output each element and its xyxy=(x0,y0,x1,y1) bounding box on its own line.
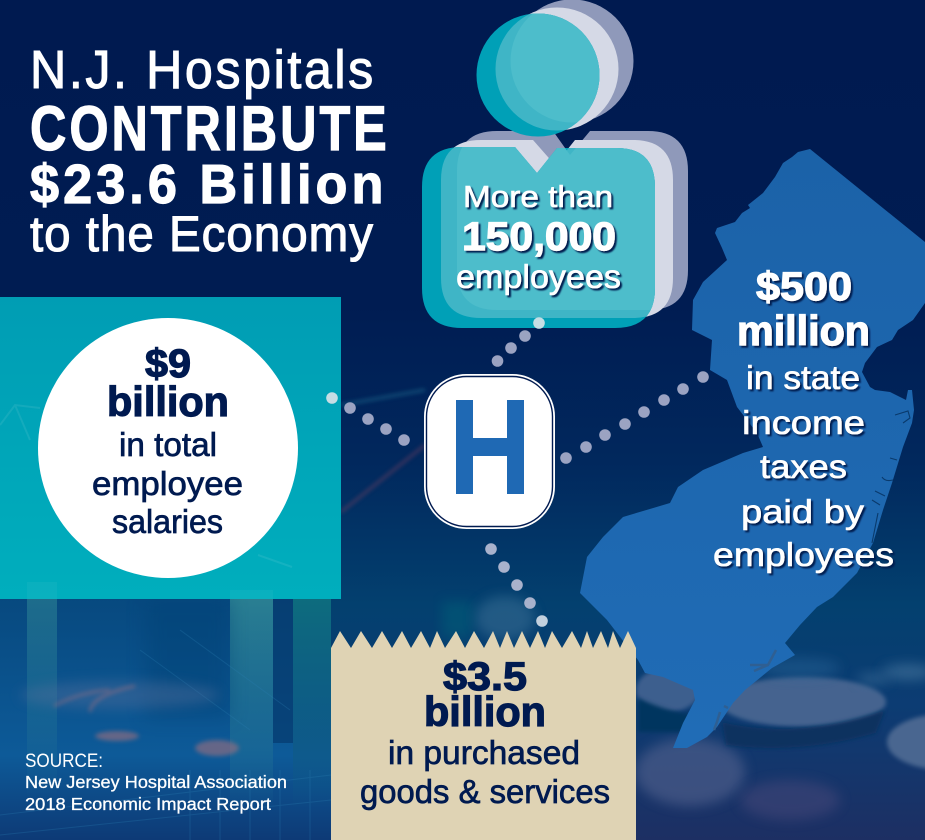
employees text: employees xyxy=(456,258,621,295)
connector dots to map xyxy=(560,371,709,464)
source text: 2018 Economic Impact Report xyxy=(25,794,271,814)
panel: employees person icon xyxy=(422,0,688,328)
panel: salaries circle: salaries xyxy=(112,503,223,540)
source text: SOURCE: xyxy=(25,751,103,772)
panel: purchases paper bag: in purchased xyxy=(388,734,580,771)
employees text: More than xyxy=(463,179,613,214)
map text: $500 xyxy=(756,265,852,309)
connector dots to salaries xyxy=(326,392,410,446)
employees text: 150,000 xyxy=(462,215,616,259)
panel: salaries circle: in total xyxy=(119,426,217,463)
map text: million xyxy=(737,307,870,354)
panel: purchases paper bag: $3.5 xyxy=(443,655,527,699)
panel: salaries circle: $9 xyxy=(145,342,191,386)
map text: income xyxy=(742,404,865,441)
title: N.J. Hospitals xyxy=(30,40,373,100)
source text xyxy=(25,751,287,814)
panel: purchases paper bag xyxy=(331,631,636,840)
panel: salaries teal square xyxy=(0,297,341,599)
icon: hospital H xyxy=(424,374,554,528)
map text: employees xyxy=(713,536,894,573)
panel: salaries circle xyxy=(38,318,298,578)
panel: salaries circle: employee xyxy=(92,465,243,502)
employees text xyxy=(456,179,621,295)
panel: salaries circle: billion xyxy=(107,378,229,425)
map text: taxes xyxy=(760,448,847,485)
map text: paid by xyxy=(741,493,865,530)
title: $23.6 Billion xyxy=(30,154,383,215)
map of New Jersey xyxy=(580,149,925,748)
panel: purchases paper bag: goods & services xyxy=(360,773,610,810)
map text xyxy=(713,265,894,573)
source text: New Jersey Hospital Association xyxy=(25,772,287,792)
connector dots to employees xyxy=(492,317,545,367)
title: to the Economy xyxy=(30,207,374,262)
panel: purchases paper bag: billion xyxy=(424,688,546,735)
title xyxy=(30,40,387,262)
connector dots to purchases xyxy=(485,543,548,627)
map text: in state xyxy=(746,359,860,396)
title: CONTRIBUTE xyxy=(30,94,387,164)
